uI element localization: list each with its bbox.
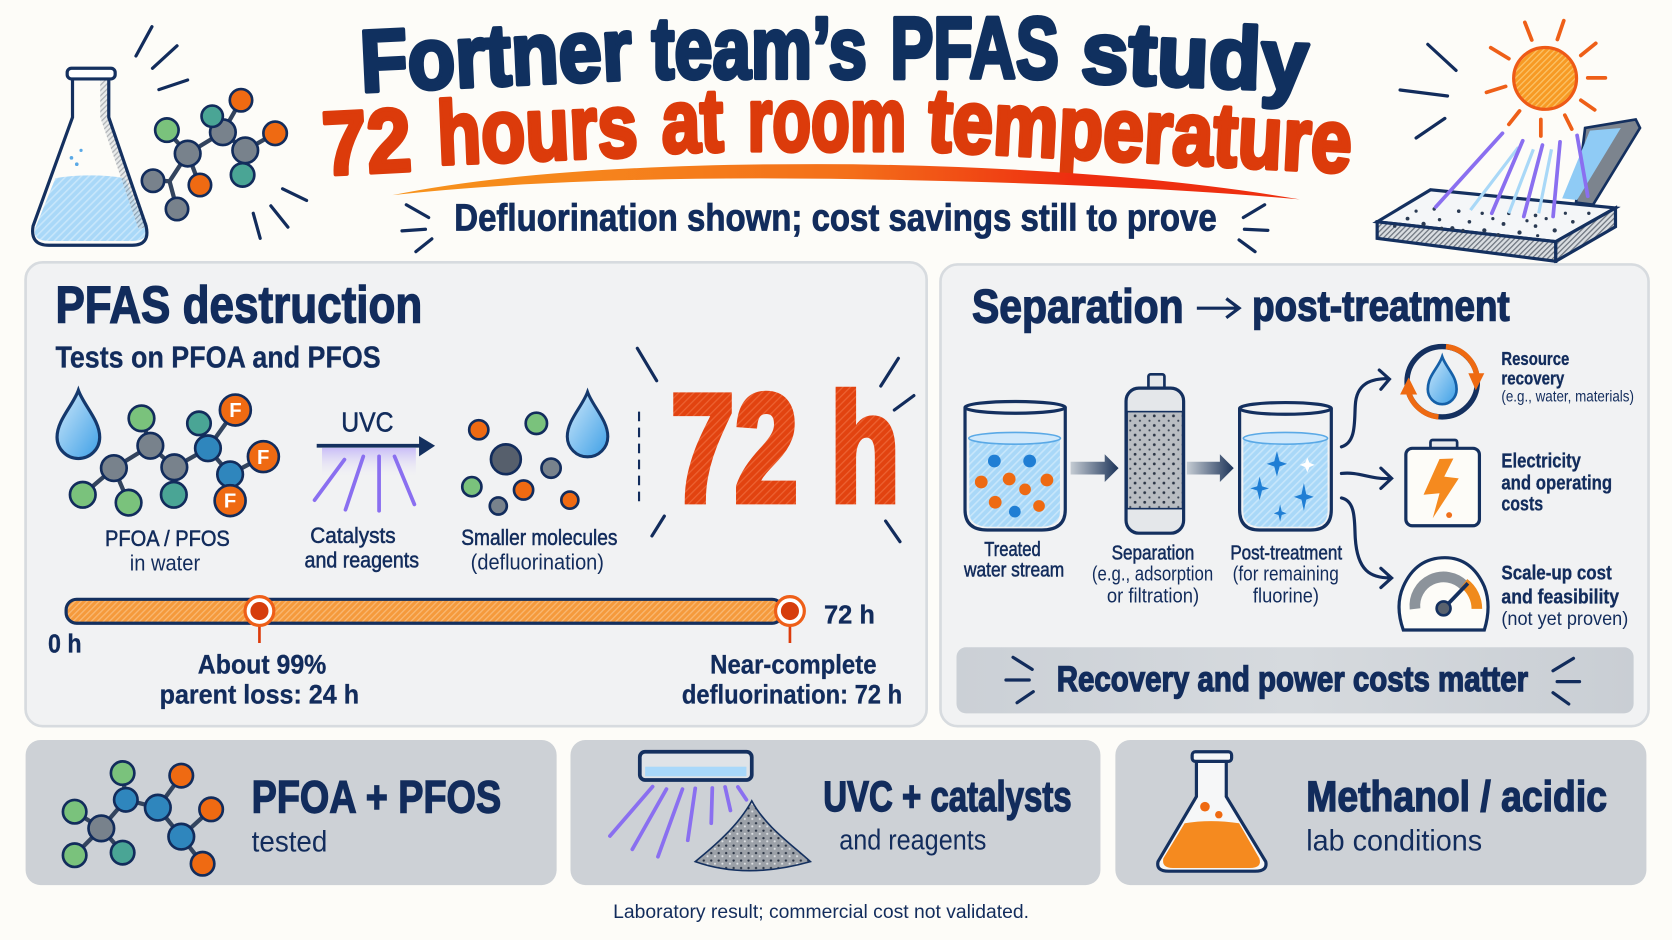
timeline labels: defluorination: 72 h bbox=[682, 679, 902, 709]
big number: 72 h bbox=[637, 348, 914, 542]
title: team’s bbox=[652, 0, 867, 97]
flask bbox=[33, 68, 148, 245]
flow labels bbox=[963, 539, 1342, 607]
icon: flask with orange liquid bbox=[1158, 752, 1266, 871]
label: electricity and operating costs: and operating bbox=[1501, 472, 1612, 494]
arrow to separation bbox=[1071, 454, 1119, 482]
icon: PFOA/PFOS molecule in water: F bbox=[257, 447, 269, 469]
label: electricity and operating costs bbox=[1501, 450, 1612, 516]
label: PFOA / PFOS in water: in water bbox=[130, 551, 201, 576]
timeline labels bbox=[48, 601, 902, 709]
icon: separation cartridge bbox=[1126, 374, 1184, 533]
label: scale-up cost and feasibility: (not yet proven) bbox=[1501, 609, 1628, 630]
marker: 24 h bbox=[245, 597, 274, 643]
flow labels: Post-treatment bbox=[1230, 542, 1342, 564]
subtitle headline: 72 hours at room temperature: room bbox=[747, 69, 906, 169]
icon: UV lamp and catalyst pile bbox=[610, 752, 810, 871]
subtitle headline: 72 hours at room temperature: at bbox=[660, 70, 725, 171]
brush underline bbox=[392, 164, 1300, 199]
flow labels: Separation bbox=[1112, 542, 1194, 564]
label: PFOA / PFOS in water: PFOA / PFOS bbox=[105, 526, 230, 551]
icon: PFOA/PFOS molecule in water bbox=[57, 390, 279, 516]
card text: and reagents bbox=[839, 824, 986, 856]
icon: scale-up gauge bbox=[1399, 558, 1488, 630]
label: smaller molecules (defluorination) bbox=[461, 525, 617, 574]
flow labels: (for remaining bbox=[1233, 564, 1339, 586]
label: resource recovery: (e.g., water, materials) bbox=[1501, 389, 1634, 406]
panel: PFAS destruction bbox=[26, 262, 927, 726]
label: electricity and operating costs: costs bbox=[1501, 494, 1543, 516]
label: resource recovery: Resource bbox=[1501, 349, 1569, 369]
timeline labels: parent loss: 24 h bbox=[160, 679, 359, 709]
subheading: Tests on PFOA and PFOS bbox=[55, 339, 381, 374]
slab bbox=[1377, 190, 1615, 261]
icon: molecule bbox=[63, 761, 223, 875]
timeline labels: 0 h bbox=[48, 631, 82, 659]
flow labels: (e.g., adsorption bbox=[1092, 564, 1213, 586]
frame bbox=[1562, 119, 1640, 205]
marker: 72 h bbox=[776, 597, 804, 643]
flow labels: or filtration) bbox=[1107, 585, 1199, 607]
icon: PFOA/PFOS molecule in water: F bbox=[229, 400, 242, 422]
card: PFOA + PFOS tested bbox=[26, 740, 557, 885]
subtitle headline: 72 hours at room temperature: 72 bbox=[320, 89, 414, 194]
label: catalysts and reagents bbox=[305, 523, 419, 572]
icon: UVC arrow with rays bbox=[315, 407, 435, 511]
burst ticks bbox=[136, 27, 307, 238]
branch arrows bbox=[1341, 370, 1392, 588]
callout banner: Recovery and power costs matter bbox=[1057, 660, 1528, 699]
heading: PFAS destruction bbox=[55, 277, 422, 335]
flow labels: fluorine) bbox=[1253, 585, 1319, 607]
flow labels: Treated bbox=[984, 539, 1041, 561]
timeline labels: Near-complete bbox=[710, 649, 877, 679]
card text: Methanol / acidic bbox=[1306, 773, 1607, 821]
timeline bar bbox=[66, 597, 804, 643]
card text: lab conditions bbox=[1306, 825, 1482, 858]
label: resource recovery bbox=[1501, 349, 1634, 406]
label: smaller molecules (defluorination): Smaller molecules bbox=[461, 525, 617, 550]
icon: beaker with contaminated water bbox=[965, 401, 1065, 530]
subtitle headline: 72 hours at room temperature: hours bbox=[435, 75, 639, 183]
subtitle headline: 72 hours at room temperature: temperature bbox=[926, 69, 1355, 192]
arrow to post-treatment bbox=[1187, 454, 1234, 482]
card text bbox=[823, 773, 1072, 856]
label: electricity and operating costs: Electricity bbox=[1501, 450, 1582, 472]
title: study bbox=[1079, 3, 1311, 110]
card text bbox=[1306, 773, 1607, 858]
icon: flask with molecule bbox=[33, 27, 307, 245]
card text: UVC + catalysts bbox=[823, 773, 1072, 821]
callout banner bbox=[956, 647, 1634, 713]
timeline labels: About 99% bbox=[198, 649, 326, 679]
subtitle headline: 72 hours at room temperature bbox=[320, 69, 1355, 194]
panel: separation and post-treatment bbox=[940, 264, 1649, 726]
title bbox=[358, 0, 1311, 111]
label: PFOA / PFOS in water bbox=[105, 526, 230, 576]
UV beams bbox=[1470, 147, 1552, 213]
timeline labels: 72 h bbox=[824, 601, 875, 629]
navy ticks bbox=[1400, 44, 1456, 138]
tagline: Defluorination shown; cost savings still to prove bbox=[454, 196, 1217, 239]
title: PFAS bbox=[890, 0, 1059, 97]
icon: beaker with treated water bbox=[1240, 403, 1331, 530]
flow labels: water stream bbox=[963, 560, 1064, 582]
heading: Separation bbox=[972, 281, 1184, 333]
icon: PFOA/PFOS molecule in water: F bbox=[224, 491, 236, 513]
card text: PFOA + PFOS bbox=[252, 771, 501, 823]
card: methanol / acidic bbox=[1115, 740, 1646, 885]
label: catalysts and reagents: Catalysts bbox=[310, 523, 396, 548]
heading bbox=[972, 281, 1510, 333]
title: Fortner bbox=[358, 0, 634, 111]
label: scale-up cost and feasibility: and feasibility bbox=[1501, 586, 1620, 608]
tagline ticks bbox=[402, 205, 1268, 252]
card text bbox=[252, 771, 501, 859]
icon: smaller molecules bbox=[462, 392, 608, 515]
label: scale-up cost and feasibility bbox=[1501, 562, 1628, 630]
icon: sun over treatment slab bbox=[1377, 21, 1640, 261]
label: resource recovery: recovery bbox=[1501, 368, 1564, 388]
icon: UVC arrow with rays: UVC bbox=[341, 407, 393, 438]
molecule bbox=[142, 89, 287, 220]
label: scale-up cost and feasibility: Scale-up cost bbox=[1501, 562, 1612, 584]
heading: post-treatment bbox=[1252, 283, 1510, 331]
card: UVC + catalysts bbox=[570, 740, 1100, 885]
big number: 72 h: 72 h bbox=[671, 362, 900, 534]
sun bbox=[1486, 21, 1605, 136]
icon: resource recovery bbox=[1400, 347, 1484, 417]
card text: tested bbox=[252, 826, 327, 859]
footer note: Laboratory result; commercial cost not validated. bbox=[613, 902, 1029, 923]
icon: electricity battery bbox=[1406, 440, 1479, 526]
label: catalysts and reagents: and reagents bbox=[305, 547, 419, 572]
label: smaller molecules (defluorination): (defluorination) bbox=[471, 549, 604, 574]
